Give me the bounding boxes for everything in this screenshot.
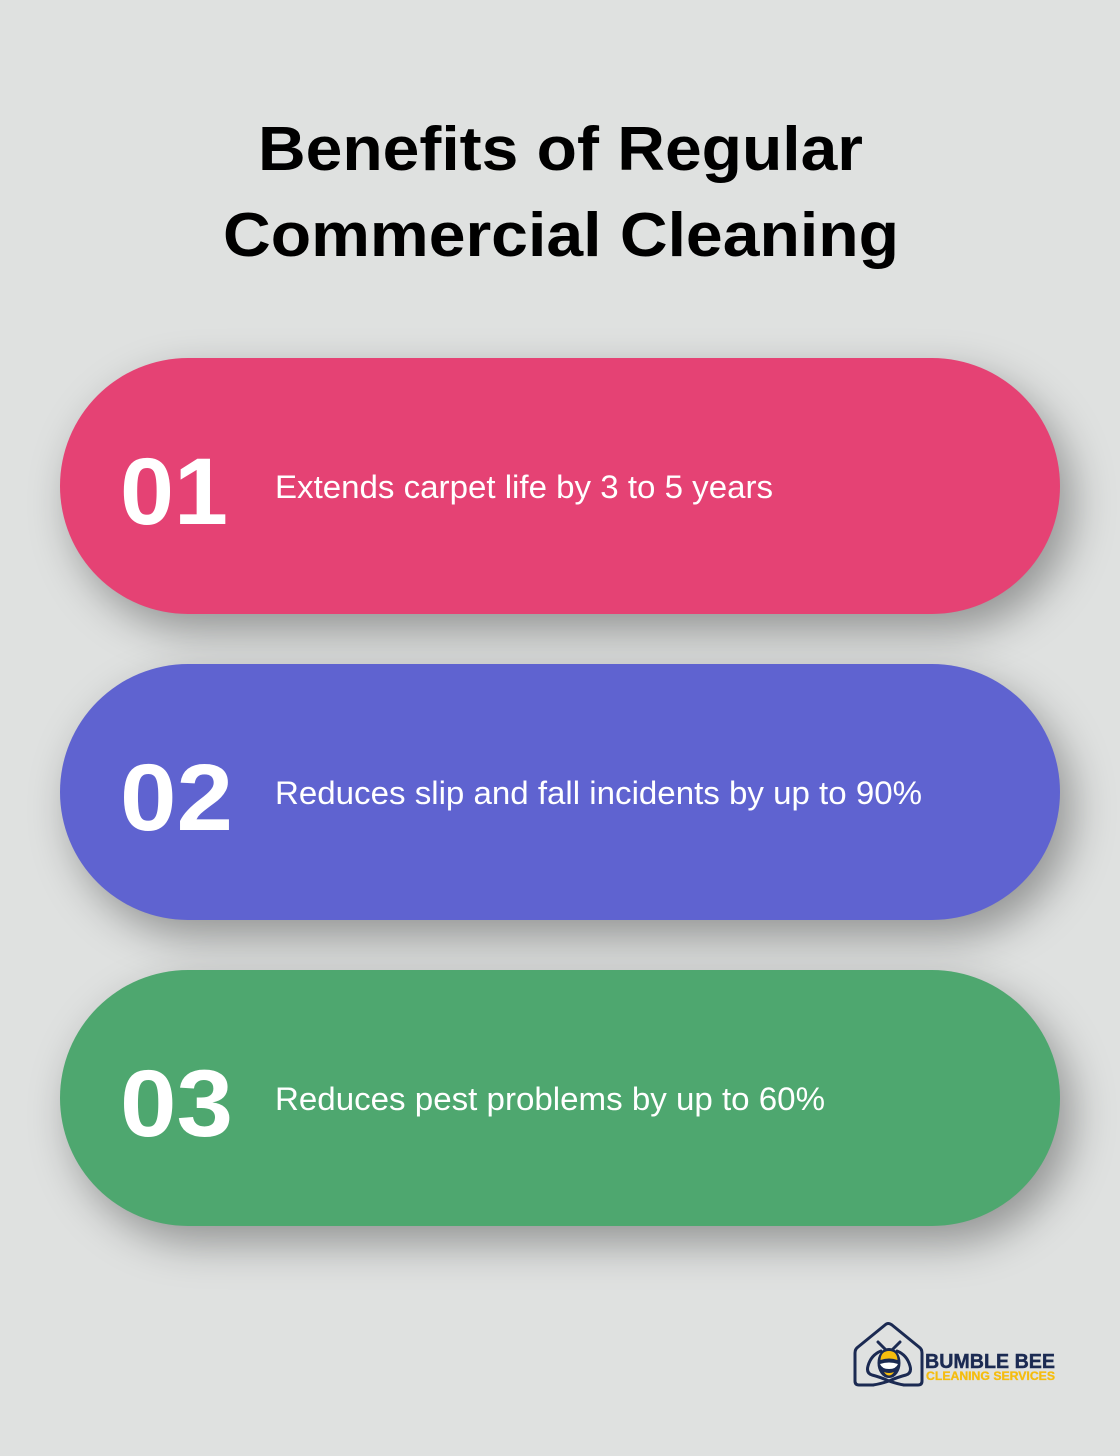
card background: 02 [60, 664, 1060, 920]
card background: 03 [60, 970, 1060, 1226]
item 03: 03 [120, 1051, 233, 1157]
logo wordmark: BUMBLE BEE [925, 1351, 1055, 1373]
item 01: 01 [120, 439, 228, 545]
item 02: 02 [120, 745, 233, 851]
title: Commercial Cleaning [223, 201, 899, 270]
item 02: Reduces slip and fall incidents by up to 90% [275, 775, 922, 811]
item 03: Reduces pest problems by up to 60% [275, 1081, 825, 1117]
logo wordmark: CLEANING SERVICES [926, 1371, 1055, 1383]
item 02 [120, 745, 922, 851]
icon: house with bee [855, 1324, 922, 1385]
title: Benefits of Regular [258, 115, 863, 184]
item 01 [120, 439, 773, 545]
item 03 [120, 1051, 825, 1157]
item 01: Extends carpet life by 3 to 5 years [275, 469, 773, 505]
card background: 01 [60, 358, 1060, 614]
logo wordmark [925, 1351, 1055, 1383]
logo: Bumble Bee Cleaning Services [855, 1324, 1055, 1385]
title [223, 115, 899, 270]
